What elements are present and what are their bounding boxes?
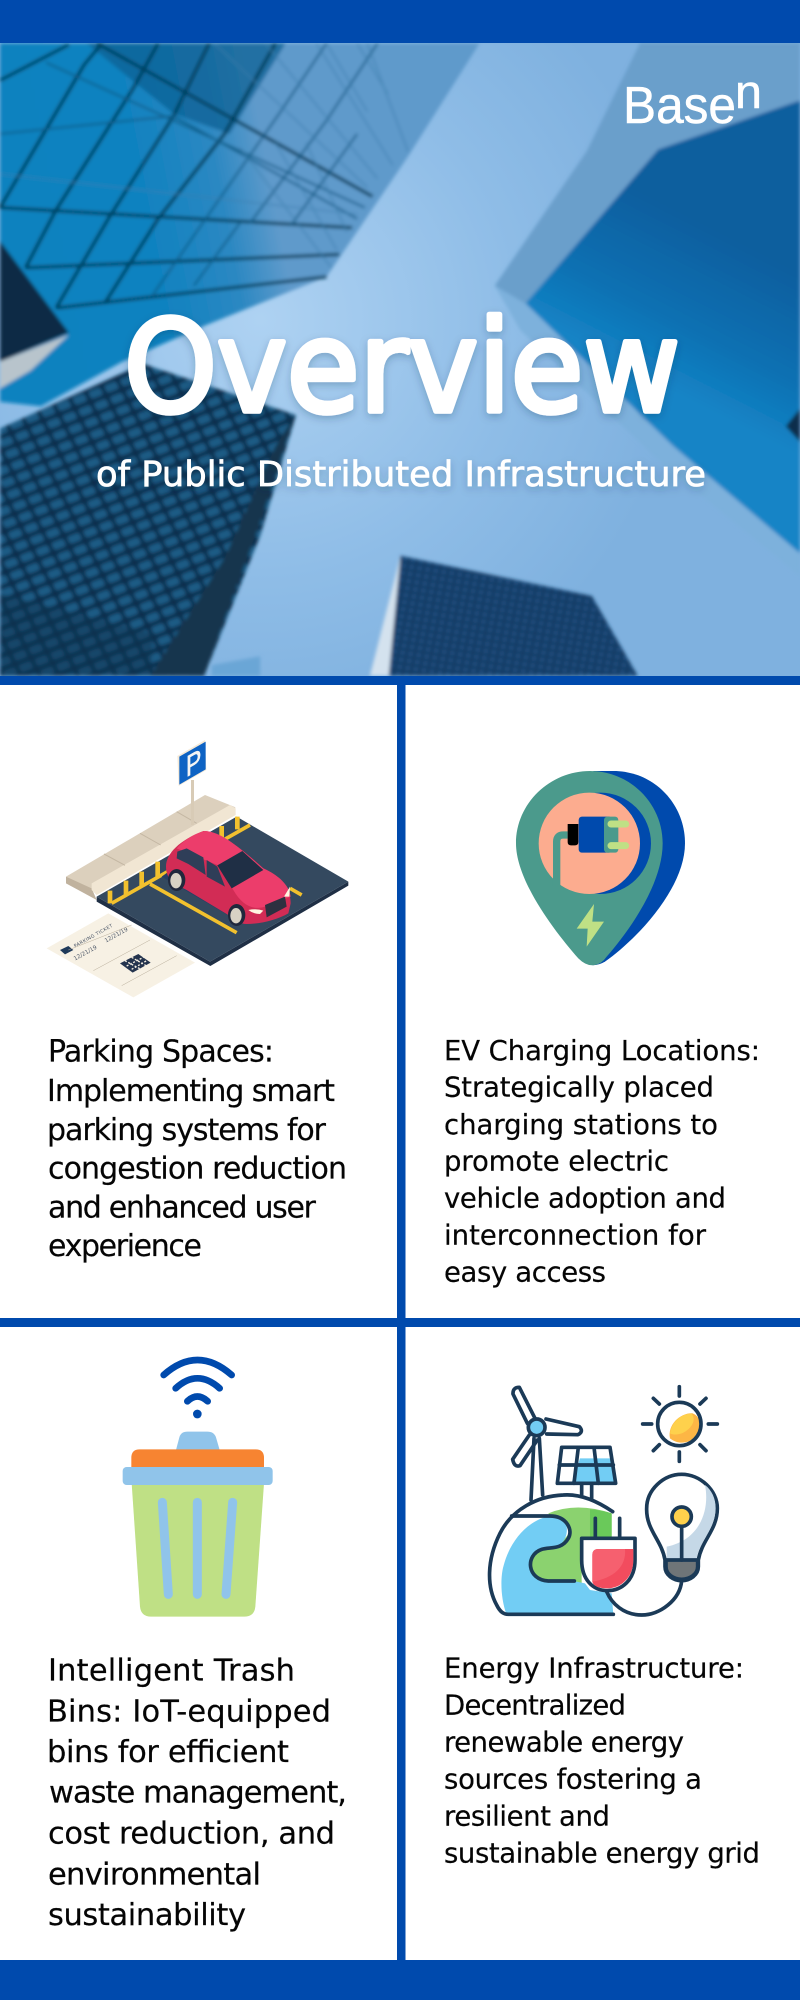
text: intelligent trash bins: Intelligent Trash <box>48 1654 295 1689</box>
text: EV charging: EV Charging Locations: <box>444 1035 760 1067</box>
hero photo: skyscrapers <box>0 43 800 676</box>
text: parking spaces: experience <box>48 1229 202 1264</box>
text: EV charging: easy access <box>444 1257 606 1289</box>
text: parking spaces <box>47 1035 347 1264</box>
icon: parking lot with car and ticket: P <box>186 742 201 784</box>
text: EV charging <box>444 1035 760 1289</box>
text: energy infrastructure: Decentralized <box>444 1689 626 1721</box>
small distant building <box>212 656 260 676</box>
text: intelligent trash bins <box>47 1654 347 1933</box>
text: intelligent trash bins: waste management, <box>49 1776 347 1811</box>
text: energy infrastructure: Energy Infrastructure: <box>444 1652 744 1684</box>
text: energy infrastructure <box>444 1652 760 1869</box>
text: energy infrastructure: renewable energy <box>444 1727 684 1759</box>
panel: intelligent trash bins <box>47 1360 347 1933</box>
icon: parking lot with car and ticket: PARKING TICKET <box>73 923 114 949</box>
dark wedge <box>0 241 69 362</box>
bottom-left tower <box>0 364 296 676</box>
text: parking spaces: parking systems for <box>47 1113 327 1148</box>
text: intelligent trash bins: sustainability <box>48 1898 246 1933</box>
text: intelligent trash bins: cost reduction, and <box>48 1816 335 1851</box>
text: parking spaces: Parking Spaces: <box>48 1035 274 1070</box>
panel: EV charging <box>444 771 760 1289</box>
icon: EV charging pin <box>516 771 685 965</box>
text: energy infrastructure: resilient and <box>444 1800 610 1832</box>
icon: renewable energy <box>490 1387 717 1615</box>
icon: parking lot with car and ticket: 12/21/19 <box>104 927 130 944</box>
text: EV charging: charging stations to <box>444 1109 718 1141</box>
text: EV charging: interconnection for <box>444 1220 707 1252</box>
text: parking spaces: and enhanced user <box>48 1190 317 1225</box>
left upper tower <box>0 43 480 406</box>
icon: parking lot with car and ticket <box>47 740 348 997</box>
logo: Basen: n <box>735 65 762 118</box>
text: EV charging: promote electric <box>444 1146 669 1178</box>
right tower <box>495 43 800 554</box>
bottom-center tower <box>388 556 638 676</box>
title: Overview <box>124 293 680 441</box>
text: parking spaces: congestion reduction <box>48 1151 347 1186</box>
text: intelligent trash bins: Bins: IoT-equipped <box>47 1695 331 1730</box>
logo: Basen: Base <box>623 77 736 135</box>
grid bars <box>0 676 800 1961</box>
bottom band <box>0 1960 800 2000</box>
top band <box>0 0 800 43</box>
panel: parking spaces <box>47 740 348 1264</box>
text: energy infrastructure: sustainable energy grid <box>444 1837 760 1869</box>
text: intelligent trash bins: environmental <box>48 1857 261 1892</box>
panel: energy infrastructure <box>444 1387 760 1869</box>
text: EV charging: Strategically placed <box>444 1072 714 1104</box>
text: EV charging: vehicle adoption and <box>444 1183 726 1215</box>
text: energy infrastructure: sources fostering a <box>444 1763 702 1795</box>
icon: smart trash bin <box>123 1360 273 1617</box>
icon: parking lot with car and ticket: 12/21/19 <box>73 945 99 962</box>
text: intelligent trash bins: bins for efficient <box>47 1735 289 1770</box>
text: parking spaces: Implementing smart <box>47 1074 335 1109</box>
subtitle: of Public Distributed Infrastructure <box>96 455 706 495</box>
